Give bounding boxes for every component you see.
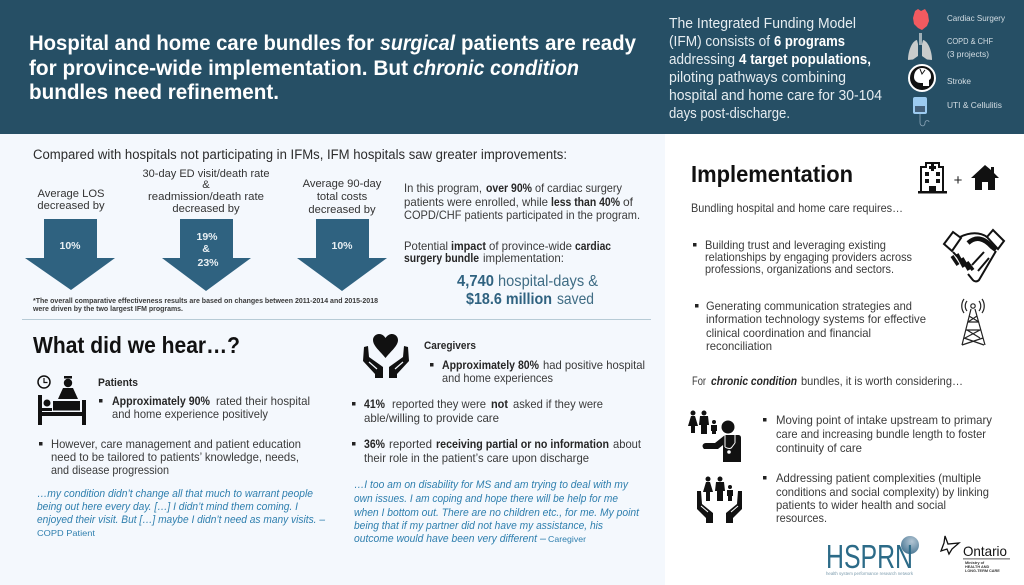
- metric: average LOS: decreased by: [37, 200, 105, 212]
- caregivers section: had positive hospital: [543, 359, 645, 372]
- patient quote: COPD Patient: [37, 528, 96, 538]
- icon: patient in bed with nurse: [38, 376, 86, 425]
- caregiver quote: Caregiver: [548, 534, 586, 544]
- enrolment text: [404, 182, 640, 222]
- metric: ED visit and readmission: &: [202, 179, 210, 191]
- logo: Ontario: HEALTH AND: [965, 565, 990, 569]
- patients section: [39, 377, 310, 477]
- IFM description: [669, 16, 882, 122]
- technology bullet: information technology systems for effective: [706, 313, 926, 326]
- title: bundles need refinement.: [29, 80, 279, 104]
- metric: total costs: 10%: [331, 240, 353, 252]
- impact text: of province-wide: [489, 240, 572, 253]
- trust bullet: Building trust and leveraging existing: [705, 239, 886, 252]
- caregivers section: and home experiences: [442, 372, 553, 385]
- complexity bullet: Addressing patient complexities (multiple: [776, 472, 981, 485]
- metric: average LOS: Average LOS: [38, 188, 104, 200]
- metric: total costs: [297, 178, 387, 291]
- program labels: COPD & CHF: [947, 36, 993, 46]
- logo: HSPRN: HSPRN: [826, 538, 913, 575]
- enrolment text: COPD/CHF patients participated in the program.: [404, 209, 640, 222]
- implementation intro: Bundling hospital and home care requires…: [691, 202, 903, 215]
- caregivers section: 36%: [364, 438, 385, 451]
- impact text: cardiac: [575, 240, 611, 253]
- logo: Ontario: Ontario: [963, 543, 1007, 559]
- comparison heading: Compared with hospitals not participating in IFMs, IFM hospitals saw greater improvements:: [33, 147, 567, 162]
- footnote: were driven by the two largest IFM programs.: [32, 306, 183, 313]
- impact text: impact: [451, 240, 486, 253]
- header banner: [0, 0, 1024, 134]
- intake bullet: continuity of care: [776, 442, 862, 455]
- caregivers section: Approximately 80%: [442, 359, 539, 372]
- intake bullet: [763, 414, 992, 455]
- caregiver quote: outcome would have been very different: [354, 533, 538, 545]
- IFM description: The Integrated Funding Model: [669, 16, 856, 32]
- icon: communication tower: [962, 299, 985, 345]
- icon: hospital plus home: +: [954, 172, 963, 189]
- title: for province-wide implementation. But: [29, 56, 408, 80]
- program labels: Stroke: [947, 76, 971, 86]
- chronic condition intro: For: [692, 375, 706, 388]
- enrolment text: over 90%: [486, 182, 532, 195]
- complexity bullet: patients to wider health and social: [776, 499, 946, 512]
- metric: average LOS: 10%: [59, 240, 81, 252]
- metric: ED visit and readmission: [142, 168, 270, 291]
- IFM description: piloting pathways combining: [669, 70, 846, 86]
- heading: implementation: Implementation: [691, 161, 853, 187]
- caregivers section: [352, 340, 645, 465]
- IFM description: addressing: [669, 52, 735, 68]
- metric: total costs: decreased by: [308, 204, 376, 216]
- caregivers section: reported: [389, 438, 432, 451]
- trust bullet: relationships by engaging providers across: [705, 251, 912, 264]
- icon: heart: [913, 9, 929, 30]
- patients section: Patients: [98, 377, 138, 389]
- logo: Ontario: LONG-TERM CARE: [965, 569, 1000, 573]
- caregiver quote: [354, 479, 640, 545]
- complexity bullet: [763, 472, 989, 525]
- enrolment text: of: [623, 196, 634, 209]
- impact text: implementation:: [483, 252, 564, 265]
- caregivers section: receiving partial or no information: [436, 438, 609, 451]
- complexity bullet: conditions and social complexity) by linking: [776, 486, 989, 499]
- IFM description: (IFM) consists of: [669, 34, 771, 50]
- title: chronic condition: [413, 56, 579, 80]
- patients section: need to be tailored to patients’ knowledge, needs,: [51, 451, 299, 464]
- chronic condition intro: chronic condition: [711, 375, 797, 388]
- savings callout: hospital-days &: [498, 273, 598, 290]
- logo: Ontario: [941, 536, 1010, 573]
- intake bullet: care and increasing bundle length to foster: [776, 428, 986, 441]
- patient quote: being out here every day. […] I didn’t mind them coming. I: [37, 501, 298, 513]
- intake bullet: Moving point of intake upstream to primary: [776, 414, 992, 427]
- technology bullet: Generating communication strategies and: [706, 300, 912, 313]
- caregivers section: reported they were: [392, 398, 486, 411]
- savings callout: 4,740: [457, 273, 494, 290]
- patient quote: [37, 488, 326, 538]
- trust bullet: professions, organizations and sectors.: [705, 263, 894, 276]
- impact text: Potential: [404, 240, 448, 253]
- caregiver quote: when I bottom out. There are no children etc., for me. My point: [354, 507, 640, 519]
- patients section: Approximately 90%: [112, 395, 210, 408]
- icon: handshake: [944, 230, 1004, 281]
- icon: heart in hands: [363, 334, 409, 378]
- metric: ED visit and readmission: 19%: [196, 231, 218, 243]
- technology bullet: clinical coordination and financial: [706, 327, 871, 340]
- metric: ED visit and readmission: decreased by: [172, 203, 240, 215]
- caregivers section: Caregivers: [424, 340, 476, 352]
- caregivers section: not: [491, 398, 508, 411]
- patient quote: …my condition didn’t change all that much to warrant people: [37, 488, 313, 500]
- trust bullet: [693, 239, 912, 276]
- program labels: (3 projects): [947, 49, 989, 59]
- logo: Ontario: Ministry of: [965, 561, 985, 565]
- caregivers section: asked if they were: [513, 398, 603, 411]
- patients section: rated their hospital: [216, 395, 310, 408]
- title: [29, 31, 636, 104]
- technology bullet: reconciliation: [706, 340, 772, 353]
- IFM description: days post-discharge.: [669, 106, 790, 122]
- IFM description: hospital and home care for 30-104: [669, 88, 882, 104]
- IFM description: 4 target populations,: [739, 52, 871, 68]
- technology bullet: [695, 300, 926, 353]
- icon: stroke head: [909, 65, 935, 91]
- metric: ED visit and readmission: &: [202, 243, 210, 255]
- chronic condition intro: [692, 375, 963, 388]
- chronic condition intro: bundles, it is worth considering…: [801, 375, 963, 388]
- patients section: and home experience positively: [112, 408, 268, 421]
- enrolment text: of cardiac surgery: [535, 182, 622, 195]
- caregiver quote: being that if my partner did not have my assistance, his: [354, 520, 603, 532]
- savings callout: saved: [557, 291, 594, 308]
- title: surgical: [380, 31, 456, 55]
- metric: ED visit and readmission: 30-day ED visit/death rate: [142, 168, 270, 180]
- footnote: *The overall comparative effectiveness results are based on changes between 2011-2014 and 2015-2018: [33, 298, 378, 305]
- caregiver quote: …I too am on disability for MS and am trying to deal with my: [354, 479, 629, 491]
- impact text: surgery bundle: [404, 252, 479, 265]
- program labels: [947, 13, 1006, 110]
- patient quote: enjoyed their visit. But […] maybe I didn’t need as many visits. –: [37, 514, 326, 526]
- savings callout: $18.6 million: [466, 291, 552, 308]
- icon: IV bag: [913, 97, 929, 126]
- metric: average LOS: [25, 188, 115, 290]
- caregivers section: their role in the patient’s care upon discharge: [364, 452, 589, 465]
- caregivers section: about: [613, 438, 642, 451]
- caregivers section: 41%: [364, 398, 385, 411]
- caregivers section: able/willing to provide care: [364, 412, 499, 425]
- enrolment text: less than 40%: [551, 196, 620, 209]
- caregiver quote: –: [539, 533, 547, 545]
- enrolment text: patients were enrolled, while: [404, 196, 548, 209]
- title: Hospital and home care bundles for: [29, 31, 375, 55]
- heading: what did we hear: What did we hear…?: [33, 332, 240, 358]
- metric: ED visit and readmission: 23%: [197, 257, 219, 269]
- title: patients are ready: [461, 31, 636, 55]
- footnote: [32, 298, 378, 313]
- metric: total costs: total costs: [317, 191, 368, 203]
- icon: hospital plus home: [918, 163, 999, 194]
- icon: family in hands: [697, 476, 742, 523]
- complexity bullet: resources.: [776, 512, 827, 525]
- patients section: However, care management and patient education: [51, 438, 301, 451]
- IFM description: 6 programs: [774, 34, 845, 50]
- impact text: [404, 240, 611, 265]
- metric: ED visit and readmission: readmission/death rate: [148, 191, 264, 203]
- program labels: Cardiac Surgery: [947, 13, 1006, 23]
- icon: lungs: [908, 33, 932, 60]
- enrolment text: In this program,: [404, 182, 482, 195]
- metric: total costs: Average 90-day: [303, 178, 382, 190]
- caregiver quote: own issues. I am coping and hope there will be help for me: [354, 493, 618, 505]
- savings callout: [457, 273, 598, 308]
- icon: family and doctor: [688, 410, 741, 462]
- logo: HSPRN: health system performance research network: [826, 571, 914, 576]
- patients section: and disease progression: [51, 464, 169, 477]
- program labels: UTI & Cellulitis: [947, 100, 1002, 110]
